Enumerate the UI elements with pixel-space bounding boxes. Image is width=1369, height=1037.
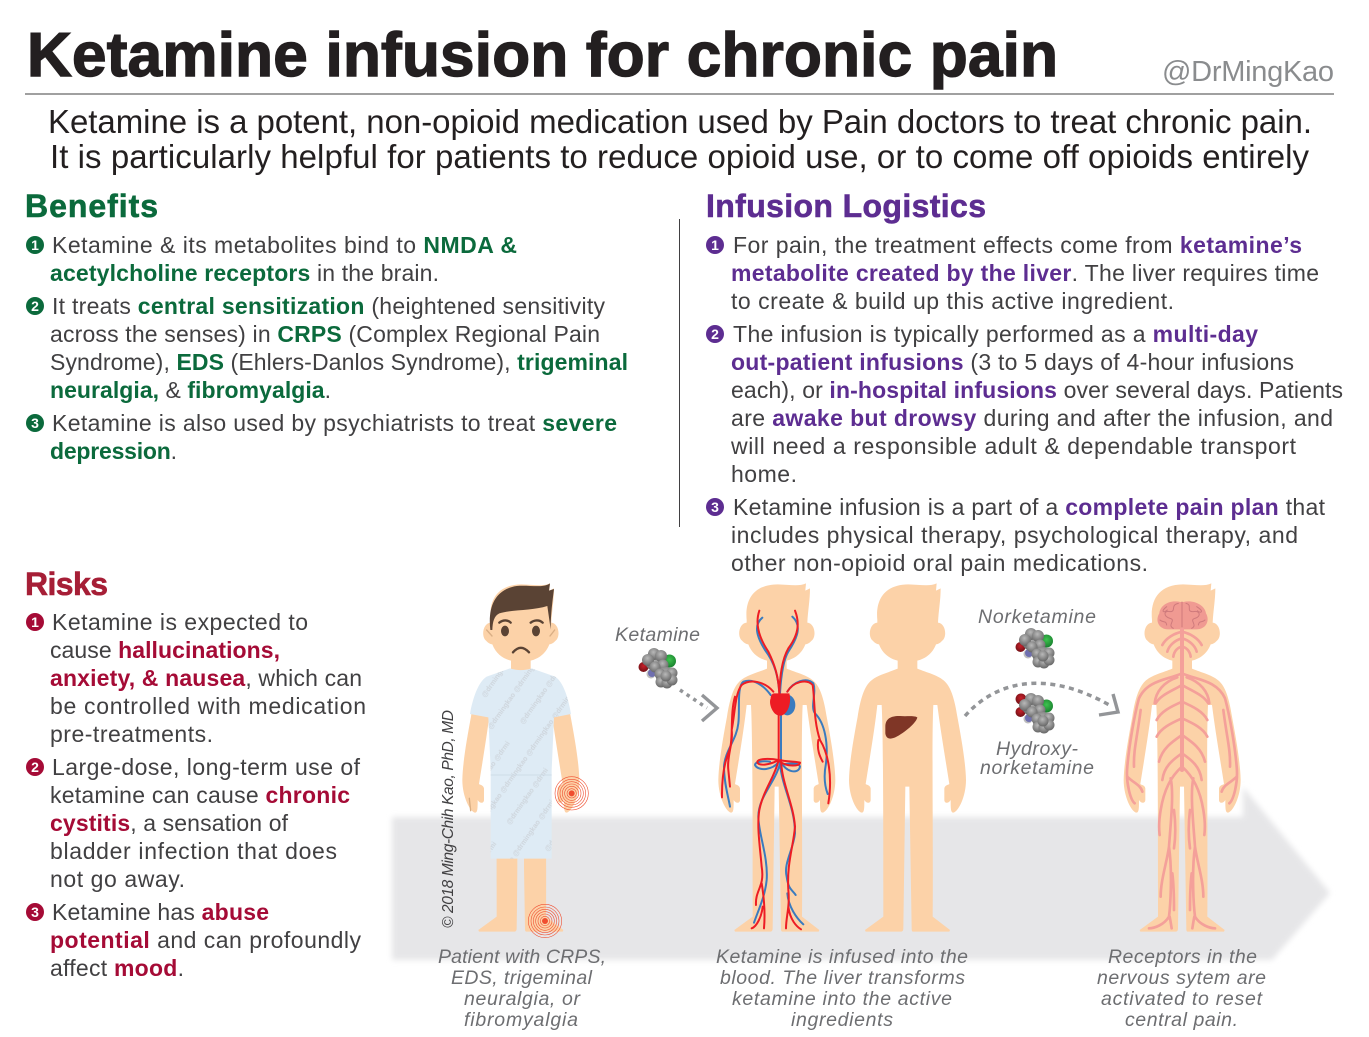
caption: patient (438, 946, 606, 1031)
copyright: © 2018 Ming-Chih Kao, PhD, MD (440, 710, 457, 928)
risk 2 (26, 754, 361, 892)
risk 3: Ketamine has abuse (52, 899, 269, 925)
risk 2: bladder infection that does (50, 838, 337, 864)
caption: infusion: ketamine into the active (732, 988, 952, 1010)
logistics 3: includes physical therapy, psychological therapy, and (731, 522, 1298, 548)
logistics 2: The infusion is typically performed as a multi-day (733, 321, 1258, 347)
pain marker: foot (528, 904, 562, 938)
label: hydroxynorketamine (980, 738, 1094, 779)
risk 3: affect mood. (50, 955, 184, 981)
risk 2: Large-dose, long-term use of (52, 754, 361, 780)
risk 1: cause hallucinations, (50, 637, 280, 663)
liver (885, 716, 917, 739)
intro text: Ketamine is a potent, non-opioid medication used by Pain doctors to treat chronic pain. (48, 103, 1312, 140)
benefit 3 (26, 410, 617, 464)
risk 1: be controlled with medication (50, 693, 366, 719)
risk 3: potential and can profoundly (50, 927, 362, 953)
label: hydroxynorketamine: Hydroxy- (996, 738, 1078, 760)
brain (1157, 601, 1208, 629)
logistics 2: are awake but drowsy during and after the infusion, and (731, 405, 1333, 431)
logistics 2: will need a responsible adult & dependable transport (730, 433, 1297, 459)
figure: liver body (849, 583, 966, 932)
caption: receptors: central pain. (1125, 1009, 1238, 1031)
icon: norketamine molecule (1016, 628, 1054, 668)
caption: patient: neuralgia, or (464, 988, 582, 1010)
logistics 1: metabolite created by the liver. The liver requires time (731, 260, 1319, 286)
panel: benefits (25, 188, 628, 464)
label: hydroxynorketamine: norketamine (980, 757, 1094, 779)
benefit 3: Ketamine is also used by psychiatrists to treat severe (52, 410, 617, 436)
benefit 2: neuralgia, & fibromyalgia. (50, 377, 331, 403)
risk 1: anxiety, & nausea, which can (50, 665, 362, 691)
logistics 2 (706, 321, 1343, 487)
caption: infusion (716, 946, 968, 1031)
nerves (1127, 629, 1237, 928)
caption: receptors: Receptors in the (1108, 946, 1257, 968)
logistics 2: each), or in-hospital infusions over several days. Patients (731, 377, 1343, 403)
benefit 2: Syndrome), EDS (Ehlers-Danlos Syndrome), trigeminal (50, 349, 628, 375)
figure: circulatory system (718, 583, 835, 932)
veins (724, 617, 828, 924)
risk 1: pre-treatments. (50, 721, 213, 747)
caption: infusion: blood. The liver transforms (720, 967, 965, 989)
risk 1 (26, 609, 366, 747)
benefit 2 (26, 293, 628, 403)
caption: patient: Patient with CRPS, (438, 946, 606, 968)
heart (770, 693, 795, 716)
title rule (25, 94, 1334, 95)
column divider (679, 219, 680, 527)
icon: ketamine molecule (638, 648, 678, 688)
label: norketamine: Norketamine (978, 606, 1096, 628)
risk 3 (26, 899, 362, 981)
logistics 2: home. (731, 461, 797, 487)
arrow: ketamine into blood (680, 690, 717, 721)
logistics 2: 2 (711, 326, 719, 342)
logistics 3 (706, 494, 1326, 576)
caption: receptors: activated to reset (1101, 988, 1264, 1010)
benefit 1: acetylcholine receptors in the brain. (50, 260, 439, 286)
logistics 1: to create & build up this active ingredient. (731, 288, 1174, 314)
risk 2: not go away. (50, 866, 185, 892)
intro text: It is particularly helpful for patients to reduce opioid use, or to come off opioids entirely (50, 138, 1310, 175)
caption: infusion: Ketamine is infused into the (716, 946, 968, 968)
benefit 1 (26, 232, 517, 286)
caption: receptors (1097, 946, 1266, 1031)
face (469, 620, 555, 811)
benefit 2: 2 (31, 298, 39, 314)
risk 2: cystitis, a sensation of (50, 810, 289, 836)
hair (490, 583, 554, 630)
intro text (48, 103, 1312, 175)
caption: infusion: ingredients (791, 1009, 893, 1031)
label: ketamine: Ketamine (615, 624, 700, 646)
benefit 3: 3 (31, 415, 39, 431)
caption: receptors: nervous sytem are (1097, 967, 1266, 989)
risk 1: 1 (31, 614, 39, 630)
hospital gown (470, 668, 571, 859)
benefit 3: depression. (50, 438, 177, 464)
arteries (722, 611, 830, 929)
logistics 3: 3 (711, 499, 719, 515)
risk 2: ketamine can cause chronic (50, 782, 350, 808)
logistics 2: out-patient infusions (3 to 5 days of 4-hour infusions (731, 349, 1294, 375)
credit handle: @DrMingKao (1162, 56, 1334, 88)
benefit 2: across the senses) in CRPS (Complex Regional Pain (50, 321, 600, 347)
logistics 3: Ketamine infusion is a part of a complete pain plan that (733, 494, 1326, 520)
panel: risks (25, 566, 366, 981)
risk 1: Ketamine is expected to (52, 609, 308, 635)
caption: patient: fibromyalgia (464, 1009, 578, 1031)
benefit 1: Ketamine & its metabolites bind to NMDA & (52, 232, 517, 258)
risks heading: Risks (25, 566, 108, 602)
risk 3: 3 (31, 904, 39, 920)
icon: hydroxynorketamine molecule (1016, 693, 1054, 734)
figure: patient (462, 583, 588, 938)
logistics 1 (706, 232, 1319, 314)
logistics 3: other non-opioid oral pain medications. (731, 550, 1148, 576)
logistics 1: 1 (711, 237, 719, 253)
caption: patient: EDS, trigeminal (451, 967, 593, 989)
arrow: metabolites to receptors (965, 683, 1118, 716)
title: Ketamine infusion for chronic pain (27, 21, 1058, 90)
panel: infusion logistics (706, 188, 1343, 576)
logistics 1: For pain, the treatment effects come from ketamine’s (733, 232, 1302, 258)
benefit 1: 1 (31, 237, 39, 253)
risk 2: 2 (31, 759, 39, 775)
benefits heading: Benefits (25, 188, 158, 224)
benefit 2: It treats central sensitization (heightened sensitivity (52, 293, 606, 319)
pain marker: wrist (555, 777, 588, 810)
figure: nervous system (1124, 583, 1241, 932)
background progress arrow (392, 787, 1330, 960)
logistics heading: Infusion Logistics (706, 188, 986, 224)
